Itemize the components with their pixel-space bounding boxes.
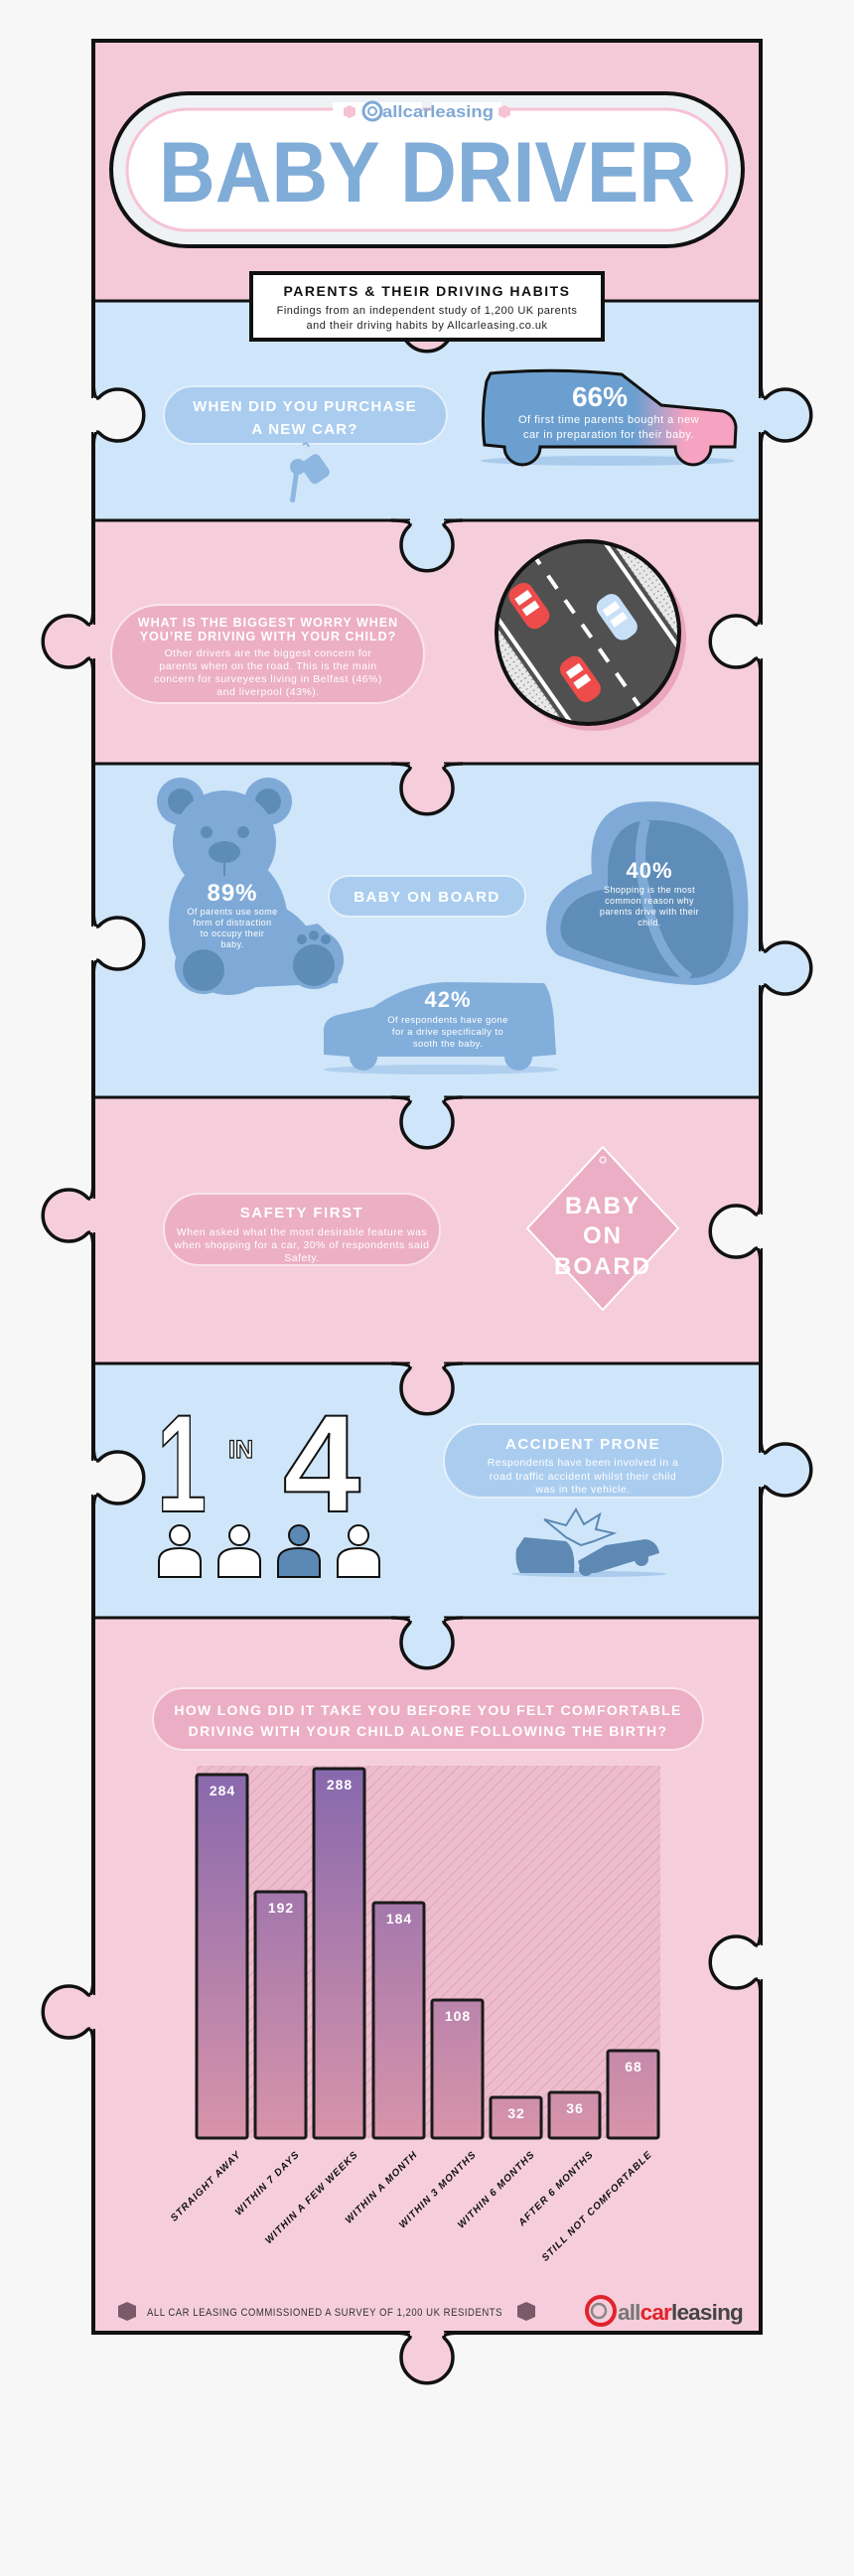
icon: car crash [511,1509,666,1577]
title text: BABY DRIVER [159,125,695,220]
bar chart: 32 [507,2105,525,2121]
panel: biggest worry: concern for surveyees living in Belfast (46%) [154,673,382,685]
panel: safety first: SAFETY FIRST [240,1205,363,1221]
car: 66%: car in preparation for their baby. [523,429,694,441]
panel: biggest worry: and liverpool (43%). [216,686,320,698]
title plate [111,93,743,246]
stat: 1 in 4: 1 [157,1385,207,1541]
icon: baby on board sign: BABY [565,1193,640,1219]
bar chart [169,1766,660,2264]
car: 66% [481,370,736,466]
icon: car seat with 40%: 40% [626,858,673,883]
car: 66%: Of first time parents bought a new [518,414,699,426]
panel: biggest worry: parents when on the road. This is the main [159,660,377,672]
panel: biggest worry: Other drivers are the biggest concern for [164,647,372,659]
stat: 1 in 4: 4 [283,1385,360,1541]
bar chart: WITHIN 3 MONTHS [397,2149,479,2230]
icon: car seat with 40%: parents drive with their [600,907,699,917]
icon: baby on board sign [527,1147,678,1310]
icon: car seat with 40%: child. [638,918,661,928]
bar chart: AFTER 6 MONTHS [516,2149,596,2229]
icon: teddy bear with 89% [157,778,344,995]
car: 66%: 66% [572,381,628,412]
icon: car with 42%: sooth the baby. [413,1039,483,1050]
icon: car seat with 40%: common reason why [605,896,694,906]
bar chart: WITHIN A MONTH [344,2149,420,2226]
footer note [118,2302,535,2321]
logo: top: allcarleasing [382,102,494,121]
panel: biggest worry: WHAT IS THE BIGGEST WORRY WHEN [138,616,398,630]
panel: safety first: when shopping for a car, 30% of respondents said [174,1239,429,1251]
icon: teddy bear with 89%: baby. [220,939,244,949]
icon: car with 42%: Of respondents have gone [387,1015,508,1026]
icon: people row [159,1525,379,1577]
icon: teddy bear with 89%: Of parents use some [187,907,278,917]
icon: car keys [290,443,332,502]
bar chart: WITHIN A FEW WEEKS [263,2149,360,2246]
panel: safety first: When asked what the most desirable feature was [177,1226,427,1238]
chart question pill [153,1688,703,1750]
logo: footer: allcarleasing [618,2300,743,2325]
bar chart: 108 [445,2008,471,2024]
heading: baby on board pill [329,876,525,917]
panel: safety first [164,1194,440,1265]
icon: car seat with 40% [546,801,748,985]
subtitle box: Findings from an independent study of 1,200 UK parents [277,305,577,317]
panel: accident prone: ACCIDENT PRONE [505,1436,660,1453]
puzzle knobs [43,298,811,2383]
panel: new car question: A NEW CAR? [251,421,358,438]
panel: new car question: WHEN DID YOU PURCHASE [193,398,417,415]
icon: car with 42%: for a drive specifically to [392,1027,503,1038]
panel: accident prone: was in the vehicle. [534,1484,631,1496]
bar chart: STILL NOT COMFORTABLE [540,2149,654,2264]
logo: top [333,102,510,121]
panel: accident prone [444,1424,723,1498]
heading: baby on board pill: BABY ON BOARD [354,889,500,906]
bar chart: WITHIN 7 DAYS [233,2149,302,2218]
footer note: ALL CAR LEASING COMMISSIONED A SURVEY OF 1,200 UK RESIDENTS [147,2307,502,2319]
bar chart: 288 [327,1777,353,1792]
subtitle box: and their driving habits by Allcarleasing.co.uk [306,320,548,332]
stat: 1 in 4: IN [228,1436,253,1464]
subtitle box [251,273,603,340]
icon: teddy bear with 89%: form of distraction [193,918,272,928]
icon: baby on board sign: BOARD [554,1253,651,1280]
chart question pill: DRIVING WITH YOUR CHILD ALONE FOLLOWING THE BIRTH? [189,1723,667,1739]
chart question pill: HOW LONG DID IT TAKE YOU BEFORE YOU FELT COMFORTABLE [174,1702,682,1718]
panel: accident prone: Respondents have been involved in a [488,1457,678,1469]
bar chart: 68 [625,2059,642,2075]
stat: 1 in 4 [157,1385,360,1541]
icon: car with 42% [324,982,558,1074]
bar chart: 284 [210,1783,235,1798]
bar chart: 36 [566,2100,584,2116]
panel: biggest worry [111,605,424,703]
icon: car with 42%: 42% [424,987,472,1012]
subtitle box: PARENTS & THEIR DRIVING HABITS [284,283,570,299]
icon: teddy bear with 89%: 89% [207,880,258,907]
panel: accident prone: road traffic accident whilst their child [490,1471,676,1483]
panel: safety first: Safety. [284,1252,320,1264]
section backgrounds [93,41,761,2333]
icon: baby on board sign: ON [583,1222,623,1249]
panel: biggest worry: YOU’RE DRIVING WITH YOUR CHILD? [140,630,396,644]
icon: road with cars [495,539,686,731]
bar chart: 192 [268,1900,294,1916]
icon: car seat with 40%: Shopping is the most [604,885,695,895]
bar chart: STRAIGHT AWAY [169,2149,243,2223]
icon: teddy bear with 89%: to occupy their [201,929,264,938]
panel: new car question [164,386,447,444]
bar chart: WITHIN 6 MONTHS [456,2149,537,2230]
bar chart: 184 [386,1911,412,1927]
